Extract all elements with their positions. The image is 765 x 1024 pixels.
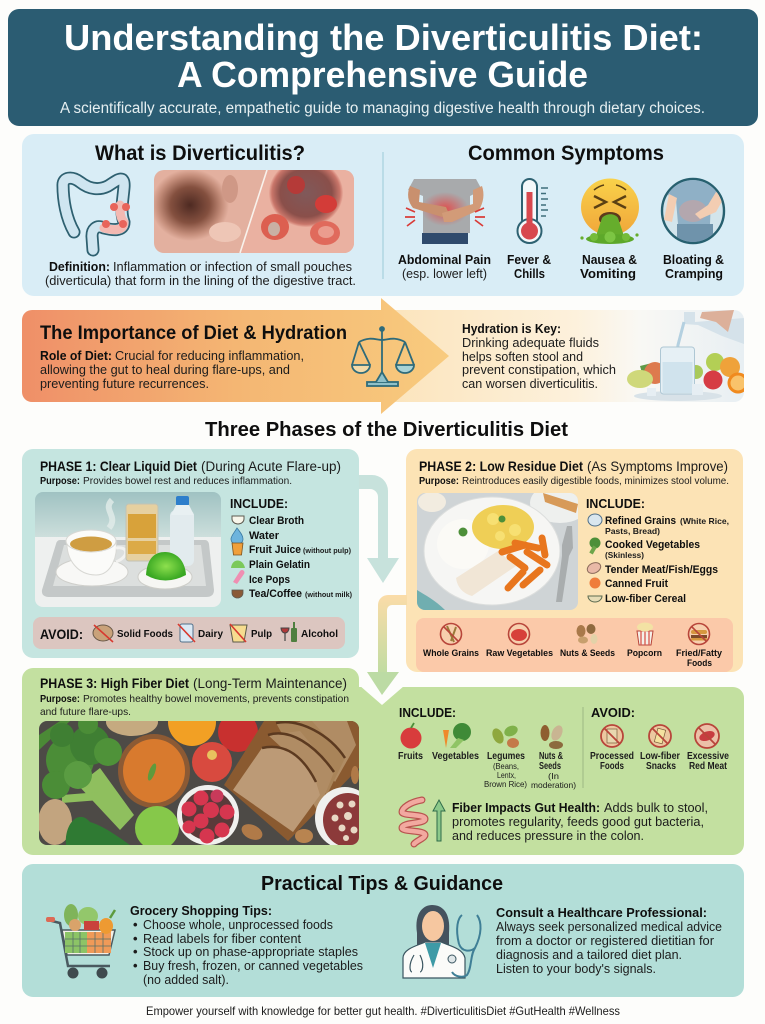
consult text: Listen to your body's signals. (496, 961, 656, 976)
grocery tips text: • (133, 931, 138, 946)
consult text: Always seek personalized medical advice (496, 919, 722, 934)
include items: Lentx, (497, 771, 516, 780)
icon: grocery cart (46, 904, 115, 978)
fiber text: Fiber Impacts Gut Health: (452, 800, 600, 815)
title: Understanding the Diverticulitis Diet: (64, 17, 703, 58)
phase 2 include heading: INCLUDE: (586, 496, 645, 511)
role of diet text: allowing the gut to heal during flare-ups, and (40, 363, 290, 377)
definition text: Definition: (49, 260, 110, 274)
icon: doctor (403, 905, 481, 978)
heading: practical tips: Practical Tips & Guidance (261, 873, 503, 895)
fiber text: and reduces pressure in the colon. (452, 828, 644, 843)
subtitle: A scientifically accurate, empathetic guide to managing digestive health through dietary choices. (60, 100, 705, 117)
include items: Legumes (487, 750, 525, 762)
icon: scales (352, 327, 414, 386)
phase 2 avoid bar: Popcorn (627, 648, 662, 659)
hydration text: prevent constipation, which (462, 363, 616, 377)
phase 2 include list: Tender Meat/Fish/Eggs (605, 564, 718, 576)
phase 2 include list: Refined Grains (605, 515, 676, 527)
panel: what is diverticulitis and symptoms (22, 134, 744, 296)
symptom labels: Bloating & (663, 253, 724, 267)
definition text: Inflammation or infection of small pouches (113, 260, 352, 274)
symptom labels: Fever & (507, 253, 551, 267)
phase 2 include list: Canned Fruit (605, 578, 668, 590)
hydration text: can worsen diverticulitis. (462, 377, 598, 391)
fiber text: promotes regularity, feeds good gut bacteria, (452, 814, 704, 829)
phase 1 include list: Tea/Coffee (249, 588, 302, 600)
grocery tips text: (no added salt). (143, 972, 229, 987)
consult text: from a doctor or registered dietitian for (496, 933, 715, 948)
icon: juice (232, 543, 243, 555)
include items: Seeds (539, 760, 561, 772)
symptom labels: (esp. lower left) (402, 267, 487, 281)
header banner (8, 9, 758, 126)
phase 1 avoid bar: Solid Foods (117, 628, 173, 640)
panel: practical tips (22, 864, 744, 997)
phase 1 avoid bar: Dairy (198, 628, 223, 640)
photo: clear liquids tray (35, 492, 221, 607)
icon: ice pop (233, 570, 244, 584)
icon: grains (588, 514, 602, 526)
icon: bloating (662, 179, 725, 246)
avoid items: Excessive (687, 750, 729, 762)
hydration text: helps soften stool and (462, 350, 583, 364)
include items: Vegetables (432, 750, 479, 762)
role of diet text: preventing future recurrences. (40, 377, 209, 391)
avoid items: Processed (590, 750, 634, 762)
grocery tips text: • (133, 944, 138, 959)
phase 2 heading: (As Symptoms Improve) (587, 459, 728, 474)
consult text (496, 905, 722, 976)
role of diet text (40, 349, 304, 391)
grocery tips text: Grocery Shopping Tips: (130, 903, 272, 918)
icon: cereal (588, 596, 602, 602)
phase 3 include heading: INCLUDE: (399, 705, 456, 720)
phase 3 avoid heading: AVOID: (591, 705, 635, 720)
icon: thermometer (518, 179, 548, 243)
symptom labels: Abdominal Pain (398, 253, 491, 267)
phase 3 purpose (40, 693, 349, 718)
phase 1 include list: Plain Gelatin (249, 559, 310, 571)
icon: red meat (695, 724, 719, 748)
phase 1 avoid bar: Pulp (251, 628, 272, 640)
avoid items: Snacks (646, 760, 676, 772)
phase 2 avoid bar: Whole Grains (423, 648, 479, 659)
phase 2 include list: Cooked Vegetables (605, 539, 700, 551)
arrow: phase 1 to phase 2 (355, 475, 399, 583)
phase 1 heading: PHASE 1: Clear Liquid Diet (40, 459, 197, 474)
include items: Fruits (398, 750, 423, 762)
phase 1 purpose: Provides bowel rest and reduces inflammation. (83, 476, 292, 487)
hydration text: Hydration is Key: (462, 322, 561, 336)
avoid items: Foods (600, 760, 624, 772)
icon: nuts (540, 724, 565, 749)
phase 1 heading (40, 459, 341, 474)
icon: gelatin (231, 560, 245, 568)
grocery tips text: • (133, 917, 138, 932)
icon: no pulp (230, 624, 247, 642)
phase 2 heading: PHASE 2: Low Residue Diet (419, 459, 583, 474)
phase 3 purpose: Promotes healthy bowel movements, prevents constipation (83, 693, 349, 705)
icon: broccoli (589, 538, 600, 554)
grocery tips text: Choose whole, unprocessed foods (143, 917, 333, 932)
icon: whole grains (440, 624, 462, 644)
icon: apple (400, 723, 422, 748)
phase 2 avoid bar: Foods (687, 658, 712, 669)
phase 2 include list: Low-fiber Cereal (605, 593, 686, 605)
consult text: diagnosis and a tailored diet plan. (496, 947, 682, 962)
phase 2 include list: (White Rice, (680, 516, 729, 526)
phase 1 include list (231, 515, 352, 600)
phase 1 include heading: INCLUDE: (230, 496, 288, 511)
phase 3 heading: (Long-Term Maintenance) (193, 676, 347, 691)
phase 1 avoid bar: Alcohol (301, 628, 338, 640)
icon: broth (232, 516, 244, 524)
icon: abdominal pain (405, 179, 485, 244)
phase 2 avoid bar: Raw Vegetables (486, 648, 553, 659)
hydration text (462, 322, 616, 391)
grocery tips text: Buy fresh, frozen, or canned vegetables (143, 958, 363, 973)
footer: Empower yourself with knowledge for better gut health. #DiverticulitisDiet #GutHealth #Wellness (146, 1004, 620, 1018)
phase 1 include list: Clear Broth (249, 515, 304, 527)
include items: Brown Rice) (484, 779, 527, 789)
phase 2 avoid bar: Nuts & Seeds (560, 648, 615, 659)
include items: (In (548, 771, 559, 781)
phase 2 purpose: Purpose: (419, 476, 459, 487)
phase 1 avoid bar (33, 617, 345, 649)
broccoli (42, 714, 134, 830)
icon: nuts (576, 624, 598, 644)
include items: moderation) (531, 780, 576, 790)
role of diet text: Role of Diet: (40, 349, 112, 363)
phase 1 avoid bar: AVOID: (40, 627, 83, 642)
icon: vegetables (443, 723, 471, 748)
panel: importance of diet and hydration (22, 298, 748, 414)
photo: colon interior (154, 170, 354, 253)
phase 2 avoid bar (416, 618, 733, 672)
icon: no dairy (178, 624, 195, 642)
title: A Comprehensive Guide (177, 54, 588, 95)
phase 3 heading: PHASE 3: High Fiber Diet (40, 676, 189, 691)
icon: legumes (490, 724, 519, 748)
role of diet text: Crucial for reducing inflammation, (115, 349, 304, 363)
phase 3 purpose: and future flare-ups. (40, 706, 131, 718)
phase 1 include list: (without milk) (305, 590, 352, 599)
heading: three phases: Three Phases of the Diverticulitis Diet (205, 419, 568, 441)
phase 1 include list: Fruit Juice (249, 544, 301, 556)
avoid items: Red Meat (689, 760, 727, 772)
grocery tips text: Read labels for fiber content (143, 931, 301, 946)
photo: low residue plate (417, 493, 578, 610)
panel: phase 2 (406, 449, 743, 672)
icon: fried food (688, 624, 710, 644)
definition text (45, 260, 356, 288)
photo: high fiber foods (39, 721, 359, 845)
icon: popcorn (637, 622, 653, 645)
title (64, 17, 703, 95)
phase 3 heading (40, 676, 347, 691)
phase 2 purpose: Reintroduces easily digestible foods, minimizes stool volume. (462, 476, 729, 487)
arrow: phase 2 to phase 3 (359, 595, 407, 705)
icon: coffee (232, 590, 243, 598)
phase 1 include list: (without pulp) (303, 546, 351, 555)
panel: phase 3 (22, 595, 744, 855)
icon: peach (590, 578, 600, 588)
bread and board (224, 721, 359, 841)
hydration text: Drinking adequate fluids (462, 336, 599, 350)
fiber text: Adds bulk to stool, (604, 800, 708, 815)
icon: nausea face (580, 178, 639, 244)
avoid items (590, 724, 729, 772)
grocery tips text (130, 903, 363, 987)
phase 2 include list: Pasts, Bread) (605, 526, 660, 536)
include items: (Beans, (493, 762, 519, 771)
include items (398, 723, 576, 790)
phase 2 avoid bar: Fried/Fatty (676, 648, 723, 659)
phase 3 purpose: Purpose: (40, 693, 80, 705)
icon: water drop (231, 528, 243, 544)
phase 1 purpose: Purpose: (40, 476, 80, 487)
panel: phase 1 (22, 449, 359, 658)
symptom labels (398, 253, 724, 281)
icon: no alcohol (281, 622, 297, 642)
consult text: Consult a Healthcare Professional: (496, 905, 707, 920)
include items: Nuts & (539, 750, 563, 762)
grocery tips text: Stock up on phase-appropriate staples (143, 944, 358, 959)
symptom labels: Vomiting (580, 267, 636, 281)
phase 2 heading (419, 459, 728, 474)
phase 1 include list: Water (249, 530, 280, 542)
heading: what is diverticulitis: What is Diverticulitis? (95, 142, 305, 165)
icon: low fiber snacks (649, 725, 671, 747)
phase 1 heading: (During Acute Flare-up) (201, 459, 341, 474)
heading: common symptoms: Common Symptoms (468, 142, 664, 165)
fiber text (452, 800, 708, 843)
phase 1 include list: Ice Pops (249, 574, 290, 586)
icon: gut with arrow (402, 800, 445, 844)
symptom labels: Cramping (665, 267, 723, 281)
icon: processed foods (601, 725, 623, 747)
icon: meat (586, 561, 602, 575)
symptom labels: Nausea & (582, 253, 637, 267)
photo: water and fruit (627, 310, 748, 401)
grocery tips text: • (133, 958, 138, 973)
heading: importance: The Importance of Diet & Hydration (40, 323, 347, 344)
definition text: (diverticula) that form in the lining of the digestive tract. (45, 274, 356, 288)
icon: raw vegetables (508, 624, 530, 644)
arrow banner (22, 298, 449, 414)
avoid items: Low-fiber (640, 750, 680, 762)
icon: no solid foods (93, 625, 113, 642)
symptom labels: Chills (514, 267, 545, 281)
phase 2 include list (586, 514, 729, 605)
phase 2 include list: (Skinless) (605, 550, 644, 560)
icon: colon (63, 178, 130, 250)
